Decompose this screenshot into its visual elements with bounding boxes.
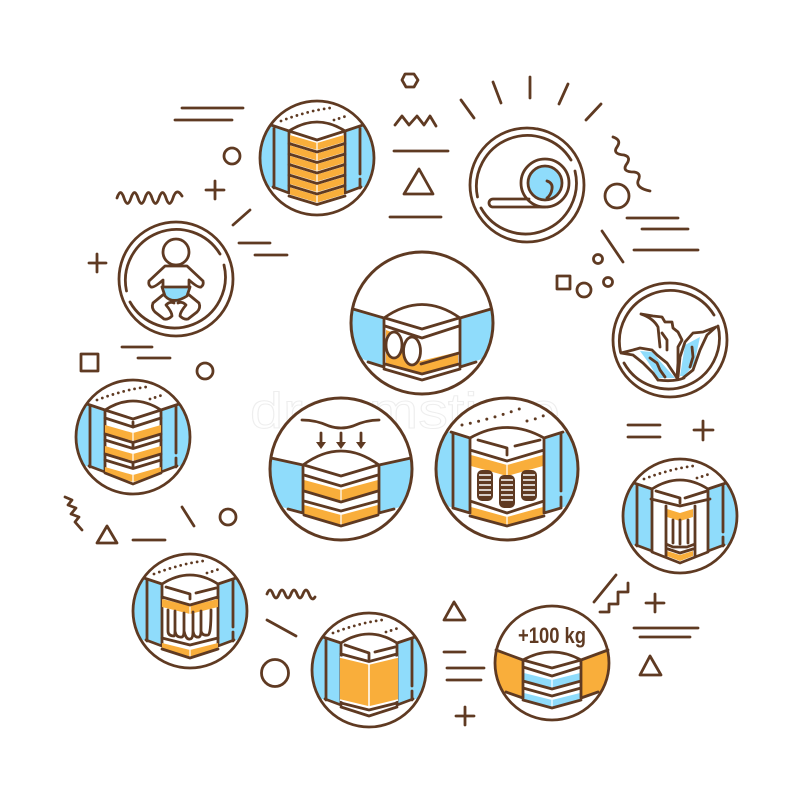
watermark: dreamstime [250,383,560,439]
label: +100 kg: +100 kg [518,623,586,648]
icon: rolled mattress [470,128,584,242]
icon: six layer mattress [255,101,379,215]
icon: aloe plant [613,283,727,397]
icon: solid foam mattress [307,613,431,727]
icon: baby [119,222,233,336]
icon: coil tube mattress [128,554,252,668]
icon: 100 kg load mattress [490,606,614,720]
icon: center spring mattress [431,398,583,540]
icon: center pressure layers [265,398,417,540]
icon: center pocket rollers [346,252,498,394]
icon: three layer mattress [71,380,195,494]
decorative geometric accents [65,74,713,725]
coil springs [477,470,537,508]
icon: column mattress [618,459,742,573]
